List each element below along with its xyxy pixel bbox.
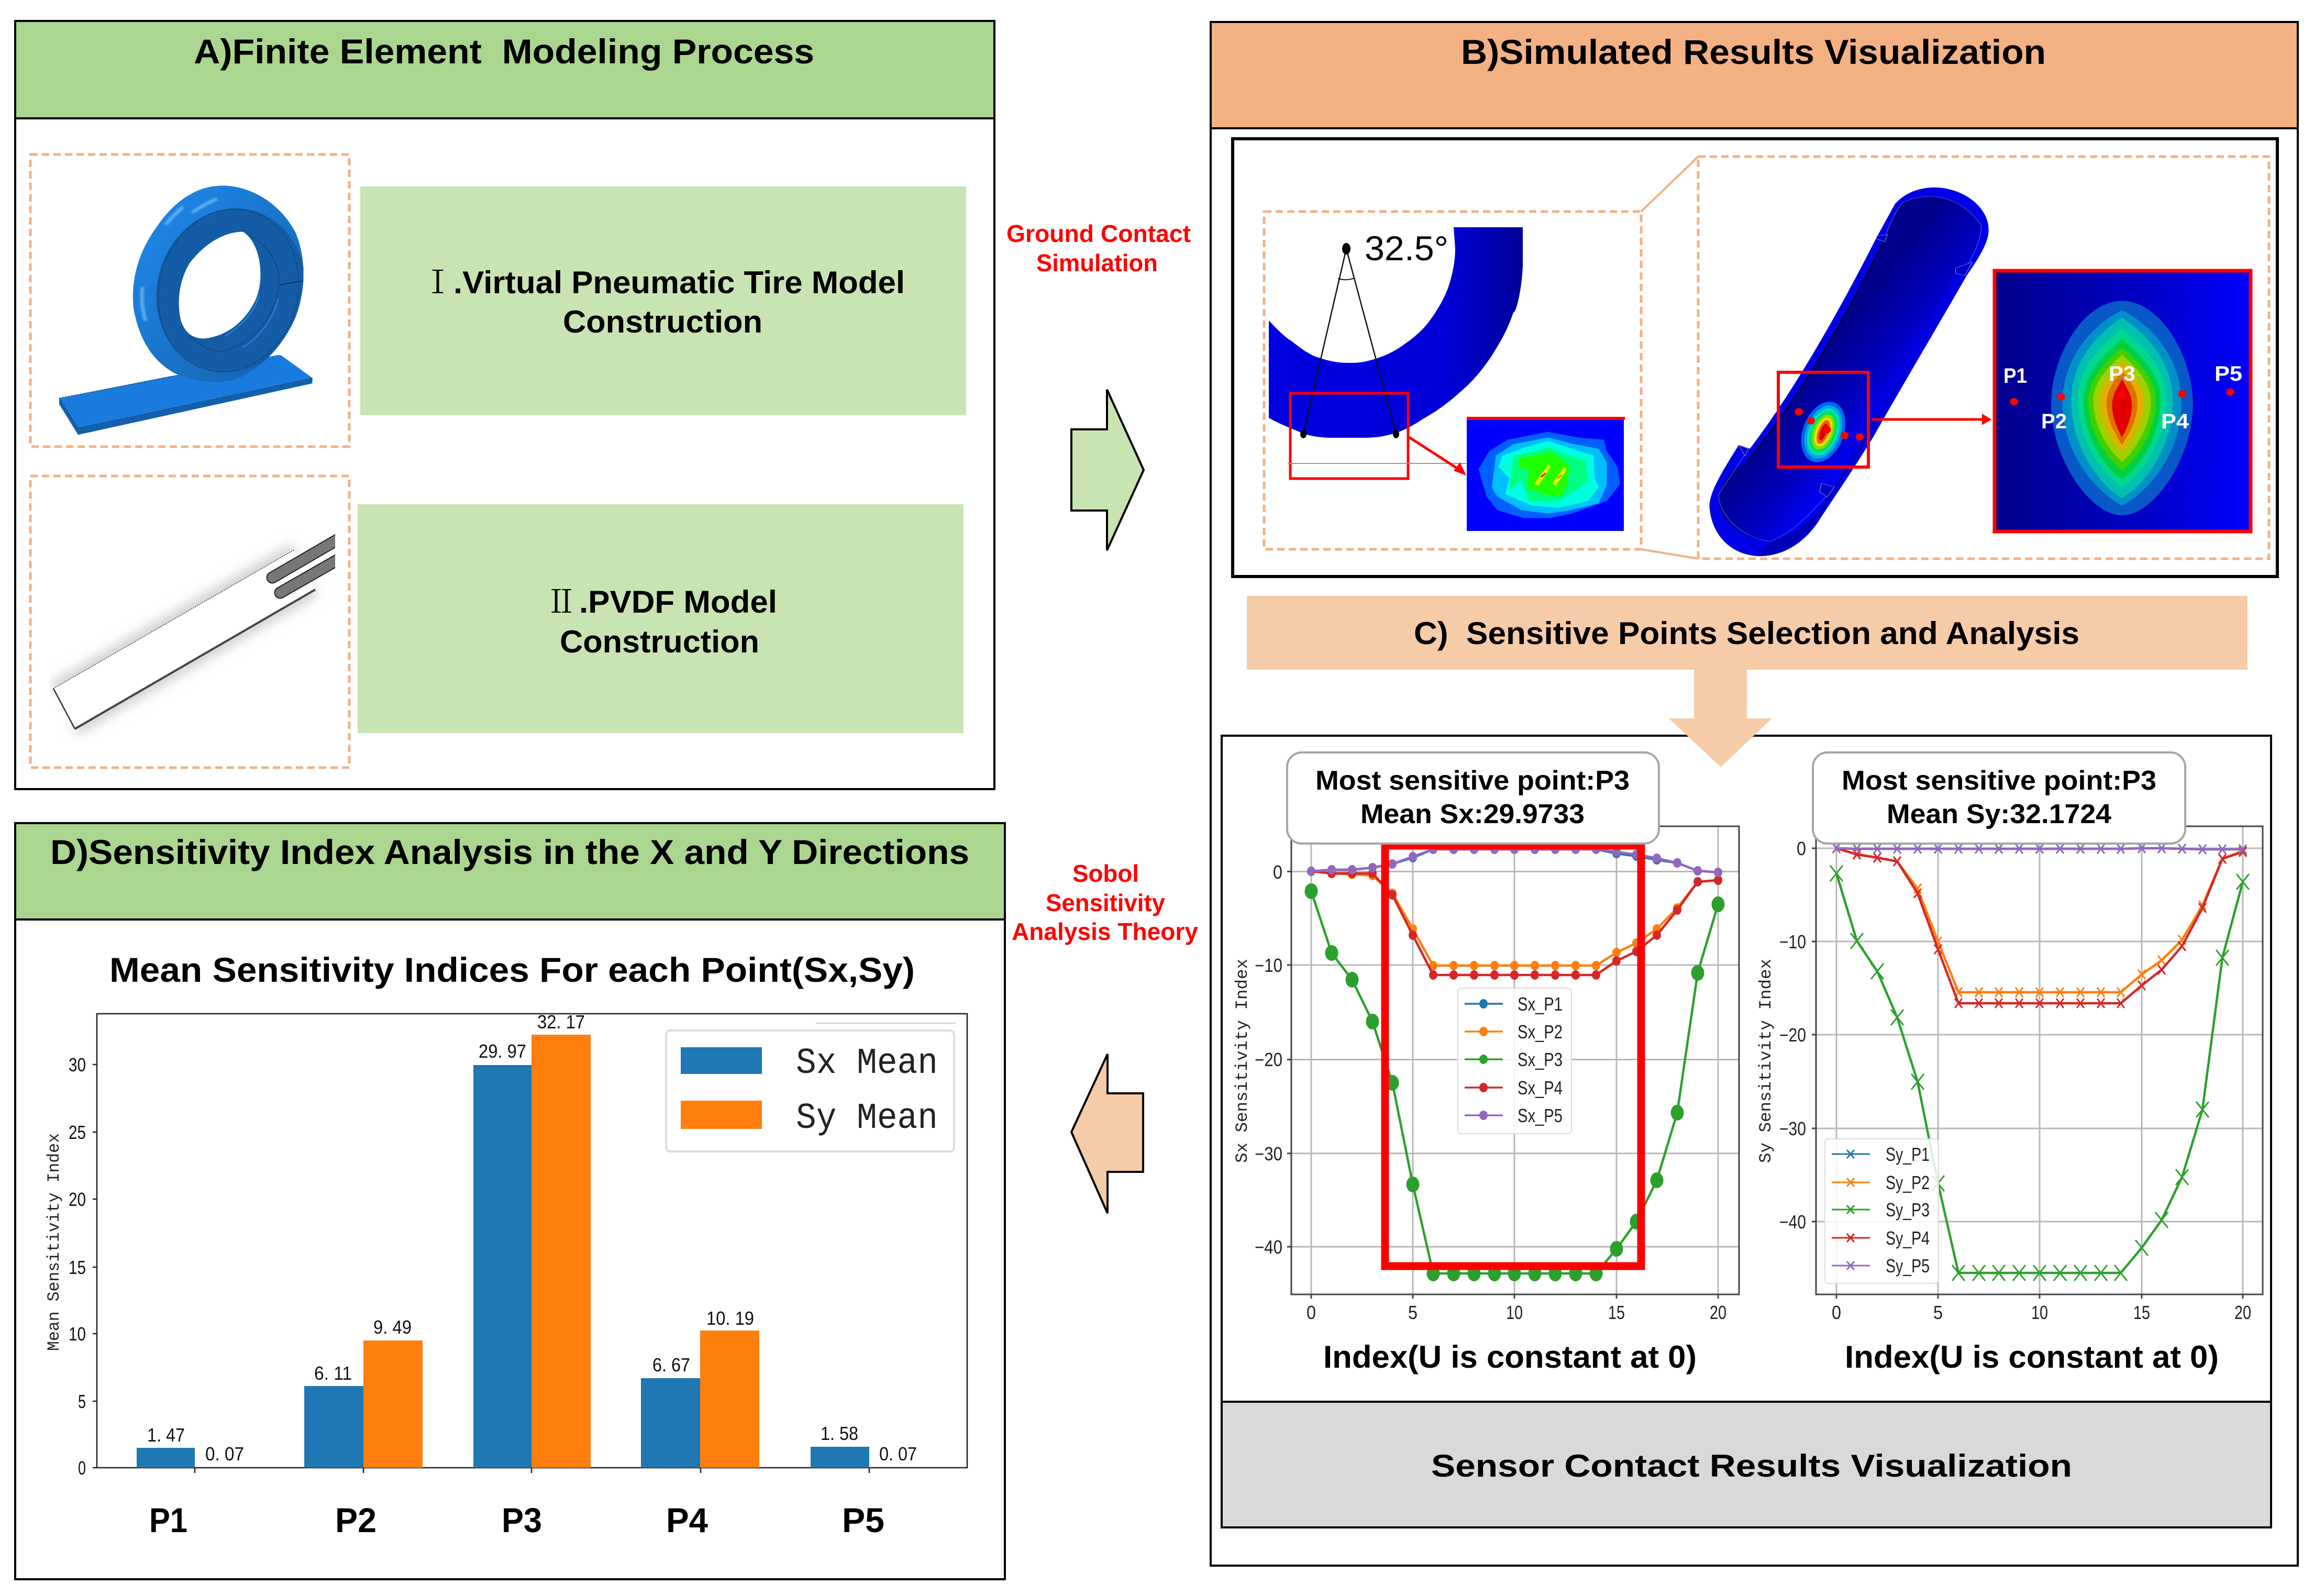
legend Sy: Sy_P4 — [1886, 1227, 1930, 1249]
x tick labels: 0 — [1307, 1302, 1316, 1323]
Sx mean bars — [137, 1065, 869, 1468]
y tick labels: 20 — [69, 1189, 86, 1210]
red arrow to contact patch — [1409, 437, 1466, 475]
panel D header — [15, 823, 1005, 919]
bar value labels: 0. 07 — [879, 1443, 917, 1465]
arrow: left to panel D — [1071, 1054, 1143, 1213]
y tick labels — [1779, 838, 1806, 1233]
panel B: simulated results visualization — [1211, 22, 2298, 1566]
y tick labels: 15 — [69, 1257, 86, 1278]
callout: most sensitive point Sy — [1813, 752, 2185, 844]
y tick labels — [69, 1054, 86, 1479]
y tick labels: −20 — [1779, 1024, 1806, 1046]
point labels P1 to P5: P1 — [2003, 364, 2027, 387]
label: Sobol sensitivity analysis theory — [1012, 860, 1198, 945]
category labels: P5 — [842, 1501, 884, 1539]
label: Sobol sensitivity analysis theory: Sensitivity — [1046, 889, 1165, 916]
series Sy P1 to P5 — [1836, 848, 2243, 1273]
x tick labels: 20 — [2234, 1302, 2251, 1323]
chart: Sy sensitivity index — [1756, 752, 2263, 1375]
legend Sx: Sx_P4 — [1518, 1077, 1563, 1099]
panel B header — [1211, 22, 2298, 128]
point labels P1 to P5: P5 — [2215, 362, 2242, 385]
label: ground contact simulation: Simulation — [1036, 249, 1158, 276]
x tick labels: 15 — [1608, 1302, 1625, 1323]
y tick labels — [1255, 861, 1282, 1258]
panel A header — [15, 21, 994, 118]
box: step II PVDF model: Construction — [560, 624, 759, 659]
box: step I tyre model — [360, 186, 966, 415]
panel A: finite element modeling process — [15, 21, 994, 789]
callout: most sensitive point Sx: Mean Sx:29.9733 — [1360, 799, 1585, 829]
box: step I tyre model: Construction — [563, 304, 762, 339]
y tick labels: −30 — [1779, 1118, 1806, 1139]
red zoom rectangle on insole — [1778, 372, 1868, 467]
x tick labels: 0 — [1832, 1302, 1841, 1323]
category labels: P4 — [666, 1501, 708, 1539]
x tick labels: 15 — [2133, 1302, 2150, 1323]
y tick labels: 30 — [69, 1054, 86, 1076]
y tick labels: −40 — [1779, 1211, 1806, 1233]
bar value labels — [147, 1011, 917, 1465]
legend Sy: Sy_P2 — [1886, 1172, 1930, 1193]
bar value labels: 6. 67 — [652, 1354, 690, 1376]
bar value labels: 1. 58 — [821, 1423, 858, 1444]
category labels: P3 — [502, 1501, 542, 1539]
bar: C sensitive points selection heading — [1247, 596, 2247, 670]
y tick labels: 0 — [1797, 838, 1806, 859]
category labels: P2 — [335, 1501, 377, 1539]
contact patch inset — [1467, 417, 1625, 531]
caption bar: sensor contact results visualization: Sensor Contact Results Visualization — [1431, 1448, 2072, 1483]
y tick labels: 25 — [69, 1122, 86, 1143]
bar value labels: 0. 07 — [205, 1443, 244, 1465]
x axis label: Index(U is constant at 0) — [1323, 1339, 1697, 1375]
legend: Sx Mean and Sy Mean: Sy Mean — [796, 1098, 938, 1139]
tyre model frame — [30, 154, 349, 447]
label: ground contact simulation — [1006, 220, 1191, 276]
x tick labels: 20 — [1710, 1302, 1726, 1323]
point labels P1 to P5: P4 — [2161, 410, 2189, 433]
x tick labels: 10 — [1506, 1302, 1523, 1323]
y tick labels: 5 — [78, 1391, 86, 1412]
x tick labels — [1307, 1302, 1726, 1323]
simulation results frame — [1233, 139, 2277, 577]
box: step II PVDF model — [358, 504, 964, 733]
icon: tyre on road plate — [59, 186, 319, 435]
label: Sobol sensitivity analysis theory: Sobol — [1072, 860, 1139, 887]
x tick labels — [1832, 1302, 2251, 1323]
PVDF model frame — [30, 476, 356, 768]
legend Sy: Sy_P3 — [1886, 1199, 1930, 1221]
y tick labels: −30 — [1255, 1143, 1282, 1165]
point labels P1 to P5 — [2003, 362, 2242, 433]
red zoom rectangle — [1290, 393, 1408, 479]
callout: most sensitive point Sx — [1287, 752, 1659, 844]
y axis label: Sx Sensitivity Index — [1233, 959, 1252, 1163]
red sensing points on insole — [1795, 408, 1864, 440]
x tick labels: 5 — [1933, 1302, 1943, 1323]
red arrow to heat map inset — [1872, 414, 1991, 425]
legend: Sx Mean and Sy Mean — [666, 1030, 954, 1151]
legend Sx: Sx_P3 — [1518, 1049, 1563, 1070]
heat spot on insole — [1793, 395, 1854, 469]
heat map inset with points — [1995, 271, 2251, 531]
y tick labels: 0 — [1273, 861, 1282, 883]
legend Sx: Sx_P1 — [1518, 993, 1563, 1015]
Sy mean bars — [363, 1035, 759, 1468]
legend Sy: Sy_P5 — [1886, 1255, 1930, 1277]
panel B header: B)Simulated Results Visualization — [1461, 32, 2046, 71]
x axis label: Index(U is constant at 0) — [1845, 1339, 2219, 1375]
connector lines — [1641, 157, 1698, 559]
panel D header: D)Sensitivity Index Analysis in the X and Y Directions — [50, 833, 969, 871]
icon: PVDF sensor strip — [53, 529, 356, 729]
y tick labels: −10 — [1779, 931, 1806, 952]
label: Sobol sensitivity analysis theory: Analysis Theory — [1012, 918, 1198, 945]
box: step II PVDF model: Ⅱ — [546, 577, 577, 622]
x tick labels: 10 — [2031, 1302, 2048, 1323]
angle value: 32.5° — [1365, 229, 1448, 268]
category labels — [149, 1501, 884, 1539]
y tick labels: 10 — [69, 1323, 86, 1345]
y axis label: Mean Sensitivity Index — [45, 1133, 64, 1351]
y tick labels: −10 — [1255, 955, 1282, 976]
bar value labels: 9. 49 — [373, 1316, 412, 1338]
insole contact model — [1710, 187, 1989, 556]
x tick labels: 5 — [1408, 1302, 1418, 1323]
bar: C sensitive points selection heading: C) Sensitive Points Selection and Analysis — [1414, 616, 2079, 651]
bar value labels: 10. 19 — [706, 1307, 754, 1329]
callout: most sensitive point Sy: Mean Sy:32.1724 — [1887, 799, 2111, 829]
red highlight rectangle — [1385, 846, 1641, 1266]
legend Sx: Sx_P2 — [1518, 1021, 1563, 1043]
down arrow — [1669, 670, 1772, 767]
bar value labels: 32. 17 — [537, 1011, 585, 1033]
bar value labels: 1. 47 — [147, 1424, 185, 1446]
bar value labels: 6. 11 — [314, 1362, 352, 1384]
arrow: right to panel B — [1071, 390, 1144, 550]
contact angle lines — [1300, 243, 1399, 438]
panel C: sensor contact results — [1222, 670, 2271, 1527]
callout: most sensitive point Sx: Most sensitive point:P3 — [1315, 766, 1630, 796]
callout: most sensitive point Sy: Most sensitive point:P3 — [1842, 766, 2156, 796]
point labels P1 to P5: P3 — [2109, 362, 2135, 385]
legend Sy — [1825, 1139, 1939, 1283]
bar value labels: 29. 97 — [479, 1040, 526, 1062]
category labels: P1 — [149, 1501, 187, 1539]
legend Sx — [1458, 988, 1571, 1134]
caption bar: sensor contact results visualization — [1222, 1402, 2271, 1527]
y axis label: Sy Sensitivity Index — [1756, 959, 1776, 1163]
box: step II PVDF model: .PVDF Model — [579, 584, 777, 619]
label: ground contact simulation: Ground Contact — [1006, 220, 1191, 247]
y tick labels: −40 — [1255, 1236, 1282, 1258]
legend: Sx Mean and Sy Mean: Sx Mean — [796, 1043, 938, 1084]
legend Sy: Sy_P1 — [1886, 1144, 1930, 1165]
series Sx P1 to P5 — [1311, 849, 1718, 1273]
chart title: Mean Sensitivity Indices For each Point(Sx,Sy) — [109, 950, 915, 989]
tyre cross-section frame — [1264, 212, 1641, 549]
bar chart: mean sensitivity indices — [45, 1011, 967, 1539]
box: step I tyre model: Ⅰ — [422, 258, 453, 303]
panel A header: A)Finite Element Modeling Process — [194, 32, 814, 71]
tyre cross section — [1269, 227, 1523, 438]
insole frame — [1698, 157, 2269, 559]
box: step I tyre model: .Virtual Pneumatic Tire Model — [453, 265, 905, 300]
panel D: sensitivity index analysis — [15, 823, 1005, 1579]
y tick labels: 0 — [78, 1457, 86, 1479]
chart: Sx sensitivity index — [1233, 752, 1739, 1375]
y tick labels: −20 — [1255, 1049, 1282, 1070]
point labels P1 to P5: P2 — [2041, 410, 2067, 433]
legend Sx: Sx_P5 — [1518, 1105, 1563, 1126]
